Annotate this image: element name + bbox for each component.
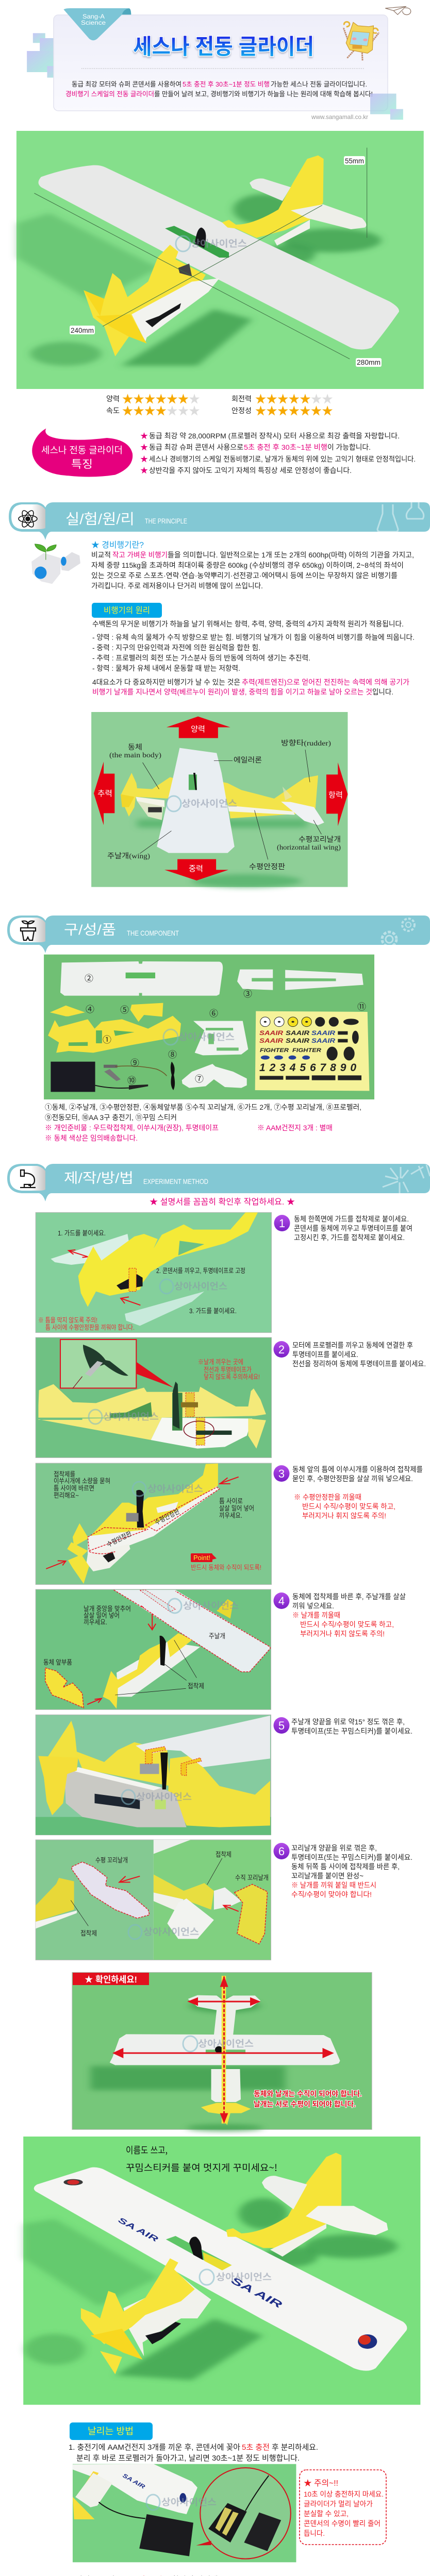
intro text: 가능한 세스나 전동 글라이더입니다. [271,80,367,88]
rating: torque: ★★★★★ [255,393,311,405]
labels: 수평안정판 [154,1507,181,1527]
step 2 text [292,1341,426,1368]
watermark: 상아사이언스 [174,1281,227,1292]
icon: plant pot [21,921,36,940]
header band [7,1164,430,1201]
instruction 1: 분리 후 바로 프로펠러가 돌아가고, 날리면 30초~1분 정도 비행합니다. [76,2454,300,2463]
rating: speed: 속도 [106,406,120,415]
arrow labels: 추력 [97,789,112,798]
labels: 살살 밀어 넣어 [84,1612,120,1619]
paragraph: 비교적 [91,551,111,559]
instruction 1: 1. 충전기에 AAM건전지 3개를 끼운 후, 콘덴서에 꽂아 [69,2443,240,2452]
step 5 text: 투명테이프(또는 꾸밈스티커)를 붙이세요. [291,1727,412,1735]
label 240mm: 240mm [71,326,94,334]
part labels: 방향타(rudder) [281,739,331,748]
step 4 text [292,1592,406,1638]
step 4 text: 부러지거나 휘지 않도록 주의! [300,1630,385,1638]
feature badge [32,429,133,477]
header panel [27,7,411,121]
principle explanation: - 양력 : 유체 속의 물체가 수직 방향으로 받는 힘. 비행기의 날개가 이 힘을 이용하여 비행기를 하늘에 띄웁니다. [92,633,415,641]
step 6 text: ※ 날개를 끼워 붙일 때 반드시 [291,1881,376,1889]
principle explanation: - 항력 : 물체가 유체 내에서 운동할 때 받는 저항력. [92,664,240,672]
rating: lift: ★★★★★★ [122,393,189,405]
check tag [73,1973,149,1985]
watermark [133,1482,203,1496]
step 1 text [294,1215,412,1242]
header subtitle: THE COMPONENT [127,929,179,937]
feature list [140,432,416,475]
watermark [168,1599,239,1613]
paragraph: 작고 가벼운 비행기 [112,551,168,559]
watermark: 상아사이언스 [191,239,247,249]
icon cell [10,918,45,942]
labels: 접착제 [188,1682,204,1690]
check tag: ★ 확인하세요! [85,1975,137,1985]
component numbers: ⑩ [127,1076,136,1086]
component list text: ※ 개인준비물 : 우드락접착제, 이쑤시개(권장), 투명테이프 [45,1124,219,1132]
instruction 2 [67,2575,227,2576]
step 5 text [291,1718,412,1735]
paragraph: 들을 의미합니다. 일반적으로는 1개 또는 2개의 600hp(마력) 이하의 기관을 가지고, [168,551,414,559]
rating: speed [106,404,200,417]
warning box: 10초 이상 충전하지 마세요. [304,2490,384,2498]
sticker sheet text: 1234567890 [259,1062,356,1074]
rating: stability: 안정성 [231,406,252,415]
rating: torque: 회전력 [231,395,252,403]
watermark: 상아사이언스 [198,2039,254,2049]
labels: 틈 사이로 [219,1497,243,1505]
step 3 text [292,1465,423,1520]
photo note: 닿지 않도록 주의하세요! [204,1373,260,1381]
heading: what is a light plane: ★ 경비행기란? [91,540,144,550]
arrow labels: 항력 [328,791,343,800]
component numbers: ⑧ [168,1050,177,1060]
badge 3: 3 [278,1467,285,1480]
labels: 수평 꼬리날개 [95,1856,128,1864]
rating: speed: ★★★ [167,404,200,417]
labels: 주날개 [209,1632,225,1640]
labels: 살살 밀어 넣어 [219,1504,254,1512]
step 6 [36,1840,412,1960]
component numbers: ⑪ [357,1002,366,1012]
ribbon [63,8,131,40]
step 3 text: 부러지거나 휘지 않도록 주의! [302,1512,386,1520]
ribbon label: Science [81,19,106,26]
watermark [89,1410,159,1424]
header title: 실/험/원/리 [65,511,135,527]
decorative squares left [27,33,63,78]
feature list: 동급 최강 슈퍼 콘덴서 사용으로 [149,443,243,451]
labels: 수평안정판 [106,1530,133,1549]
step 6 text: 동체 뒤쪽 틈 사이에 접착제를 바른 후, [291,1862,400,1871]
component numbers [85,974,366,1086]
badge 6: 6 [278,1845,285,1858]
watermark: 상아사이언스 [143,1927,199,1937]
component list text: ※ AAM건전지 3개 : 별매 [257,1124,333,1132]
paragraph: 자체 중량 115kg을 초과하며 최대이륙 중량은 600kg (수상비행의 경우 650kg) 이하이며, 2~8석의 좌석이 [91,561,404,569]
component list text: ⑨전동모터, ⑩AA 3구 충전기, ⑪꾸밈 스티커 [45,1113,177,1122]
component numbers: ③ [243,989,252,999]
icon: microscope [20,1170,36,1188]
step 2 [36,1337,426,1458]
sticker sheet text: FIGHTER [260,1047,289,1054]
watermark: 상아사이언스 [183,1601,239,1611]
watermark [122,1790,192,1804]
header title: 구/성/품 [64,922,116,938]
photo: finished glider with dimensions [16,131,424,389]
photo labels [38,1229,245,1331]
intro text: 동급 최강 모터와 슈퍼 콘덴서를 사용하여 [72,80,181,88]
photo labels: ※ 틈을 막지 않도록 주의! [38,1316,97,1324]
mascot robot [343,22,379,61]
decor: flasks [377,502,424,532]
watermark [146,2495,217,2510]
check panel [72,1972,372,2131]
step 1 text: 고정시킨 후, 가드를 접착제로 붙이세요. [294,1233,405,1242]
photo: components [44,955,374,1099]
watermark [160,1279,227,1294]
warning box: ★ 주의~!! [304,2479,338,2488]
step 3 text: 묻인 후, 수평안정판을 살살 끼워 넣으세요. [292,1475,413,1483]
decorated glider photo [23,2137,420,2405]
warning box: 콘덴서의 수명이 빨리 줄어 [304,2519,381,2528]
icon: e cubes with sprout [31,544,80,584]
rating: torque: ★★ [311,393,333,405]
photo labels: 3. 가드를 붙이세요. [189,1307,237,1315]
section header: method [7,1164,430,1201]
rating: torque [231,393,333,405]
feature list: ★ [140,466,148,475]
badge 3 [273,1465,290,1482]
step 6 text: 수직/수평이 맞아야 합니다! [291,1890,372,1899]
panel background [54,15,388,111]
check notes: 동체와 날개는 수직이 되어야 합니다. [254,2090,362,2098]
flying method [67,2422,386,2576]
rating: lift: 양력 [106,395,120,403]
feature list: 5초 충전 후 30초~1분 비행 [244,443,327,451]
component list text: ①동체, ②주날개, ③수평안정판, ④동체앞부품 ⑤수직 꼬리날개, ⑥가드 2개, ⑦수평 꼬리날개, ⑧프로펠러, [45,1103,361,1111]
step 6 photo [36,1840,271,1960]
ratings [106,393,333,417]
intro text: 를 만들어 날려 보고, 경비행기와 비행기가 하늘을 나는 원리에 대해 학습해 봅시다! [154,90,373,98]
arrow labels: 중력 [189,865,203,873]
step 1 [36,1212,412,1333]
button: principle of flight [92,603,162,618]
rating: lift: ★ [189,393,200,405]
watermark [176,236,247,251]
part labels: 수평꼬리날개 [299,835,341,843]
check photo [72,1972,372,2131]
components shapes [44,955,374,1099]
diagram photo [91,712,348,888]
header title: 제/작/방/법 [64,1171,134,1186]
labels: 날개 중앙을 맞추어 [84,1605,131,1613]
header band [9,502,430,540]
step 3 [36,1463,423,1585]
component list text [45,1103,361,1142]
labels: 동체 앞부품 [43,1658,72,1666]
charging photo [73,2464,296,2562]
part labels: 주날개(wing) [107,852,150,860]
step 2 text: 투명테이프를 붙이세요. [292,1350,358,1359]
step 3 text: ※ 수평안정판을 끼울때 [294,1493,361,1501]
icon cell [10,1166,45,1191]
sticker sheet text: SAAIR [286,1029,309,1037]
principle explanation: - 추력 : 프로펠러의 회전 또는 가스분사 등의 반동에 의하여 생기는 추진력. [92,654,310,662]
sticker sheet text [259,1029,356,1074]
badge 4 [273,1592,290,1609]
component numbers: ⑤ [120,1005,129,1015]
part labels: 동체 [128,743,142,751]
sticker sheet text: SAAIR [259,1029,283,1037]
part labels: 에일러론 [234,756,262,764]
ribbon label: Sang-A [82,13,105,20]
step 3 text: 동체 앞의 틈에 이쑤시개를 이용하여 접착제를 [292,1465,423,1473]
instruction 1: 후 분리하세요. [272,2443,318,2452]
sticker: SA AIR left: SA AIR [117,2216,159,2244]
principle explanation: 추력(제트엔진)으로 얻어진 전진하는 속력에 의해 공기가 [242,678,409,686]
site url: www.sangamall.co.kr [311,113,368,121]
badge 5 [273,1717,290,1734]
ribbon label [81,13,106,26]
step 1 text: 콘덴서를 동체에 끼우고 투명테이프를 붙여 [294,1224,412,1232]
warning box: 글라이더가 멀리 날아가 [304,2500,373,2508]
header subtitle: THE PRINCIPLE [145,517,187,525]
badge 4: 4 [278,1595,285,1607]
icon cell [11,504,45,529]
step 5 [36,1715,412,1835]
step 2 photo [36,1337,272,1458]
principle explanation: 입니다. [372,688,393,696]
point box [191,1553,261,1571]
step 6 text: 꼬리날개 양끝을 위로 꺾은 후, [291,1844,377,1852]
component numbers: ① [103,1035,111,1045]
step 4 photo [36,1589,271,1709]
intro text: 5초 충전 후 30초~1분 정도 비행 [183,80,270,88]
watermark: 상아사이언스 [147,1484,203,1494]
sticker sheet text: SAAIR [286,1037,309,1044]
header subtitle: EXPERIMENT METHOD [143,1177,208,1185]
labels: 편리해요~ [54,1492,79,1499]
step 1 text: 동체 한쪽면에 가드를 접착제로 붙이세요. [294,1215,409,1223]
button: how to fly: 날리는 방법 [88,2426,134,2436]
handwritten caption: 꾸밈스티커를 붙여 멋지게 꾸미세요~! [126,2161,277,2174]
badge 6 [273,1843,290,1859]
principle explanation [92,620,415,696]
principle explanation: 4대요소가 다 중요하지만 비행기가 날 수 있는 것은 [92,678,240,686]
labels [43,1605,225,1690]
labels: 접착제를 [54,1470,75,1478]
feature list: 이 가능합니다. [327,443,371,451]
photo background and plane [16,131,424,389]
sticker: SA AIR right: SA AIR [229,2275,284,2311]
photo note: 전선과 투명테이프가 [204,1366,252,1374]
check notes [254,2090,362,2108]
badge 2: 2 [278,1343,285,1356]
watermark [163,1029,235,1045]
step 2 text: 모터에 프로펠러를 끼우고 동체에 연결한 후 [292,1341,413,1349]
feature list: ★ [140,432,148,440]
photo labels: 2. 콘덴서를 끼우고, 투명테이프로 고정 [156,1267,245,1275]
photo note: ※날개 끼우는 곳에 [198,1358,243,1366]
watermark [128,1925,199,1939]
feature list: 동급 최강 약 28,000RPM (프로펠러 장착시) 모터 사용으로 최강 출력을 자랑합니다. [149,432,400,440]
decorative squares right [370,94,403,120]
sticker sheet text: SAAIR [259,1037,283,1044]
instruction 1 [69,2443,318,2463]
paragraph [91,551,414,590]
badge 2 [273,1341,290,1358]
step 6 text: 투명테이프(또는 꾸밈스티커)를 붙이세요. [291,1853,412,1861]
badge text [41,445,123,470]
step 4 text: 반드시 수직/수평이 맞도록 하고, [300,1620,394,1629]
watermark [183,2036,254,2052]
part labels: (horizontal tail wing) [277,844,341,852]
button: how to fly [70,2422,153,2440]
section header: principle [9,502,430,540]
warning box: 분실할 수 있고, [304,2510,349,2518]
paper plane icon [385,7,411,15]
sticker sheet text: FIGHTER [292,1047,321,1054]
step 4 text: ※ 날개를 끼울때 [292,1611,340,1619]
part labels: (the main body) [109,752,161,759]
principle explanation: - 중력 : 지구의 만유인력과 자전에 의한 원심력을 합한 힘. [92,643,260,652]
feature list: ★ [140,443,148,452]
feature list: 세스나 경비행기의 스케일 전동비행기로, 날개가 동체의 위에 있는 고익기 형태로 안정적입니다. [149,455,416,463]
paragraph: 있는 것으로 주로 스포츠·연락·연습·농약뿌리기·선전광고·에어택시 등에 쓰이는 무장하지 않은 비행기를 [91,571,398,580]
title: 세스나 전동 글라이더 [133,35,314,59]
watermark: 상아사이언스 [103,1412,159,1422]
component numbers: ⑥ [209,1009,218,1019]
step 6 text [291,1844,412,1899]
principle text [91,540,415,696]
decor: gears [382,919,415,946]
label 55mm: 55mm [345,157,364,165]
badge 1: 1 [279,1217,285,1230]
photo note [198,1358,260,1381]
step 3 text: 반드시 수직/수평이 맞도록 하고, [302,1502,395,1511]
step 5 text: 주날개 양끝을 위로 약15° 정도 꺾은 후, [291,1718,405,1726]
step 4 text: 동체에 접착제를 바른 후, 주날개를 살살 [292,1592,406,1601]
watermark: 상아사이언스 [136,1792,192,1802]
labels [54,1470,254,1549]
decor: rays [383,1165,430,1193]
feature list: ★ [140,455,148,464]
step 5 photo [36,1715,271,1835]
warning box [300,2470,386,2545]
watermark: 상아사이언스 [216,2272,272,2282]
labels: 수직 꼬리날개 [235,1874,269,1882]
step 3 photo [36,1463,272,1585]
sticker sheet text: SAAIR [311,1029,335,1037]
handwritten caption: 이름도 쓰고, [126,2143,168,2157]
labels: 틈 사이에 바르면 [54,1484,94,1492]
labels: 끼우세요. [84,1618,107,1626]
intro text [65,80,373,98]
part labels [107,739,341,871]
check notes: 날개는 서로 수평이 되어야 합니다. [254,2100,356,2108]
badge 5: 5 [278,1719,285,1732]
labels [80,1851,269,1937]
watermark: 상아사이언스 [181,799,237,809]
section header: components [7,916,430,953]
dotted divider [81,68,364,69]
component numbers: ⑨ [130,1058,139,1068]
labels: 이쑤시개에 소량을 묻혀 [54,1477,110,1485]
icon: atom [19,509,37,529]
intro text: 경비행기 스케일의 전동 글라이더 [65,90,154,98]
step 6 text: 꼬리날개를 붙이면 완성~ [291,1872,363,1880]
badge text: 세스나 전동 글라이더 [41,445,123,455]
photo labels: 틈 사이에 수평안정판을 끼워야 합니다. [45,1324,135,1331]
labels: 접착제 [80,1929,97,1937]
component list text: ※ 동체 색상은 임의배송합니다. [45,1134,138,1142]
labels: 접착제 [216,1851,231,1858]
point box: Point! [193,1554,210,1562]
badge shape [32,429,133,477]
instruction 1: 5초 충전 [242,2443,270,2452]
diagram: four forces on plane [91,712,348,888]
badge text: 특징 [71,459,93,470]
header band [7,916,430,953]
watermark [167,796,237,811]
instruction notice: ★ 설명서를 꼼꼼히 확인후 작업하세요. ★ [150,1197,295,1207]
watermark: 상아사이언스 [161,2497,217,2507]
labels: 끼우세요. [219,1512,242,1519]
point box: 반드시 동체와 수직이 되도록! [191,1564,261,1571]
sticker on charging photo wing: SA AIR [122,2472,146,2490]
rating: stability: ★★★★★★★ [255,404,333,417]
button: principle of flight: 비행기의 원리 [104,606,150,615]
badge 1 [274,1215,290,1231]
arrow labels [97,725,343,873]
paragraph: 가리킵니다. 주로 레저용이나 단거리 비행에 많이 쓰입니다. [91,582,263,590]
principle explanation: 수백톤의 무거운 비행기가 하늘을 날기 위해서는 항력, 추력, 양력, 중력의 4가지 과학적 원리가 적용됩니다. [92,620,404,628]
label 280mm: 280mm [357,358,381,366]
arrow labels: 양력 [191,725,205,734]
warning box: 듭니다. [304,2529,325,2537]
watermark [200,2269,272,2285]
photo: decorated glider [23,2137,420,2405]
feature list: 상반각을 주지 않아도 고익기 자체의 특징상 세로 안정성이 좋습니다. [149,466,352,474]
step 4 [36,1589,406,1709]
photo labels: 1. 가드를 붙이세요. [58,1229,106,1237]
component numbers: ⑦ [195,1074,204,1084]
handwritten caption [126,2143,277,2174]
component numbers: ④ [86,1005,94,1014]
component numbers: ② [85,974,93,984]
rating: speed: ★★★★ [122,404,167,417]
sticker sheet text: SAAIR [311,1037,335,1044]
principle explanation: 비행기 날개를 지나면서 양력(베르누이 원리)이 발생, 중력의 힘을 이기고 하늘로 날아 오르는 것 [92,688,372,696]
watermark: 상아사이언스 [178,1032,235,1042]
part labels: 수평안정판 [249,862,285,871]
step 1 photo [36,1212,272,1333]
step 4 text: 끼워 넣으세요. [292,1602,334,1610]
